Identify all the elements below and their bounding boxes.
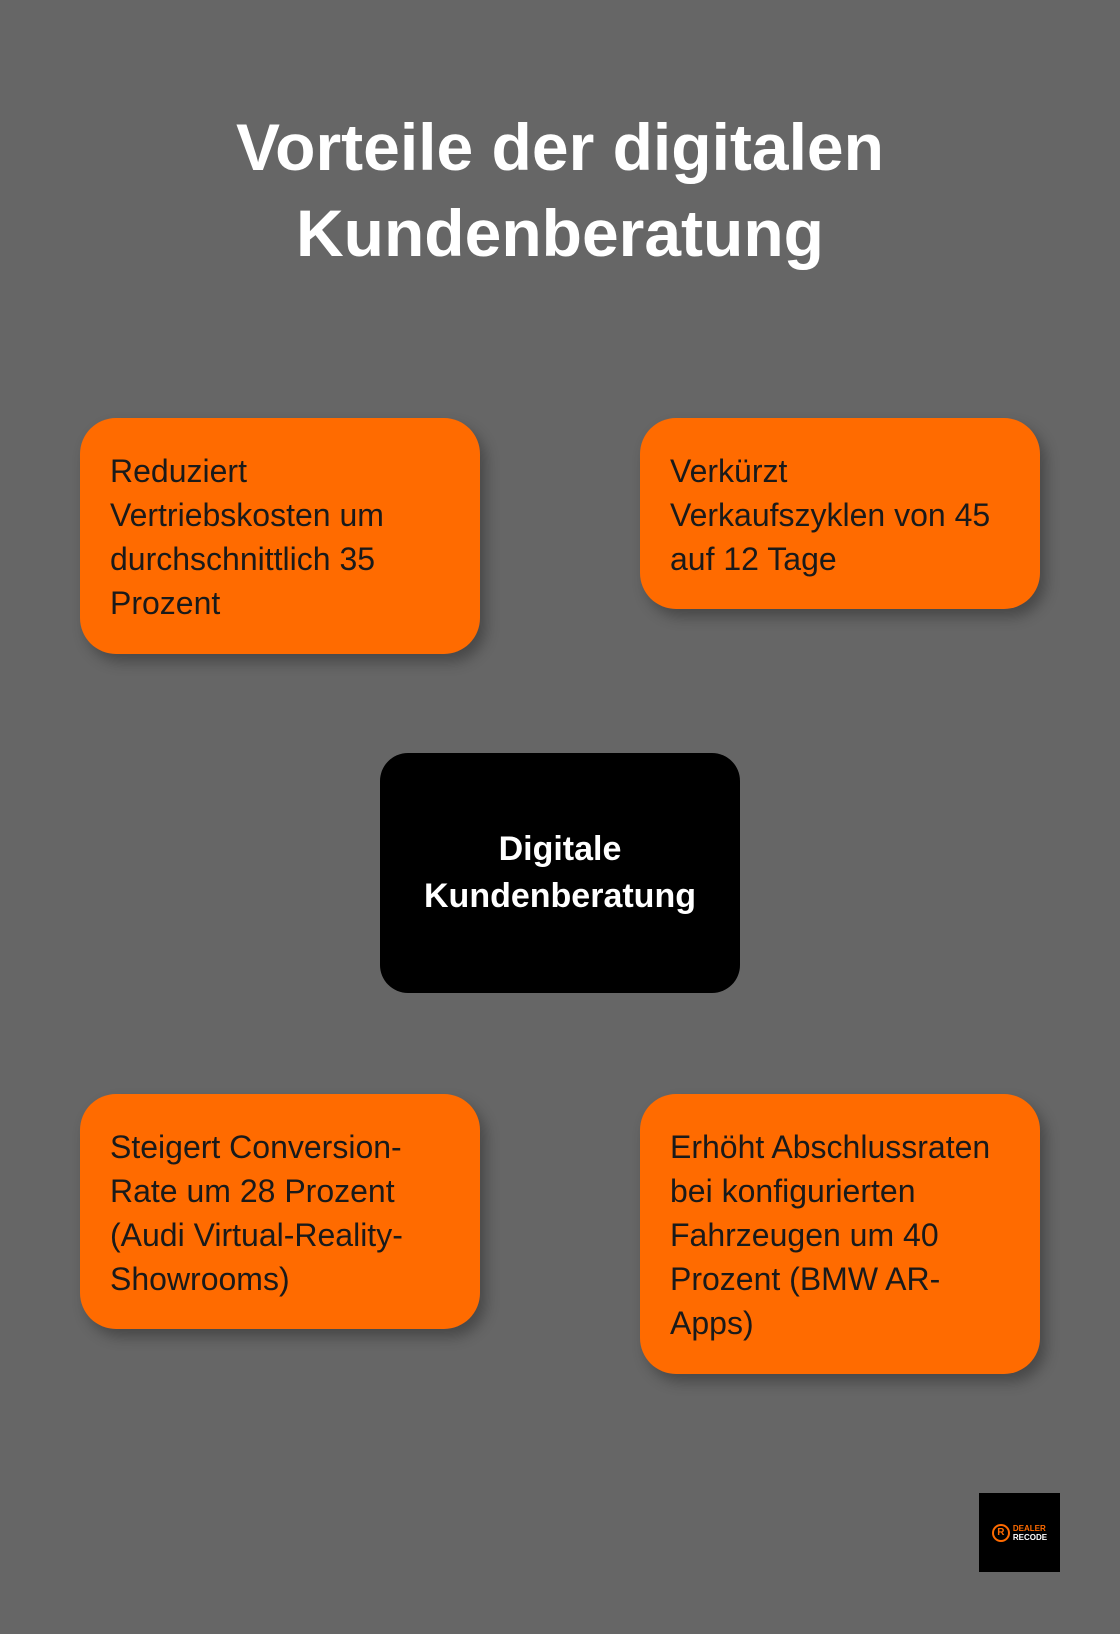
logo: DEALER (1013, 1524, 1046, 1532)
center node: Digitale (499, 830, 621, 868)
panel: sales costs: Vertriebskosten um (110, 497, 384, 533)
panel: sales cycles (640, 418, 1040, 609)
panel: closing rates: Prozent (BMW AR- (670, 1261, 940, 1297)
title: Vorteile der digitalen (236, 110, 884, 184)
center node: Kundenberatung (424, 877, 696, 915)
logo: RECODE (1013, 1532, 1047, 1542)
panel: closing rates: Fahrzeugen um 40 (670, 1217, 939, 1253)
panel: sales cycles: Verkaufszyklen von 45 (670, 497, 990, 533)
panel: sales cycles: Verkürzt (670, 453, 787, 489)
panel: conversion rate: Steigert Conversion- (110, 1129, 402, 1165)
panel: closing rates: Erhöht Abschlussraten (670, 1129, 990, 1165)
panel: closing rates: bei konfigurierten (670, 1173, 915, 1209)
panel: sales cycles: auf 12 Tage (670, 541, 837, 577)
panel: conversion rate: Rate um 28 Prozent (110, 1173, 395, 1209)
panel: sales costs: durchschnittlich 35 (110, 541, 375, 577)
panel: closing rates (640, 1094, 1040, 1374)
title (236, 110, 884, 270)
panel: conversion rate (80, 1094, 480, 1329)
panel: closing rates: Apps) (670, 1305, 754, 1341)
logo: R (997, 1526, 1004, 1538)
panel: sales costs: Prozent (110, 585, 220, 621)
center node (380, 753, 740, 993)
title: Kundenberatung (296, 196, 824, 270)
panel: conversion rate: (Audi Virtual-Reality- (110, 1217, 403, 1253)
panel: conversion rate: Showrooms) (110, 1261, 290, 1297)
panel: sales costs: Reduziert (110, 453, 247, 489)
panel: sales costs (80, 418, 480, 654)
logo (979, 1493, 1060, 1572)
